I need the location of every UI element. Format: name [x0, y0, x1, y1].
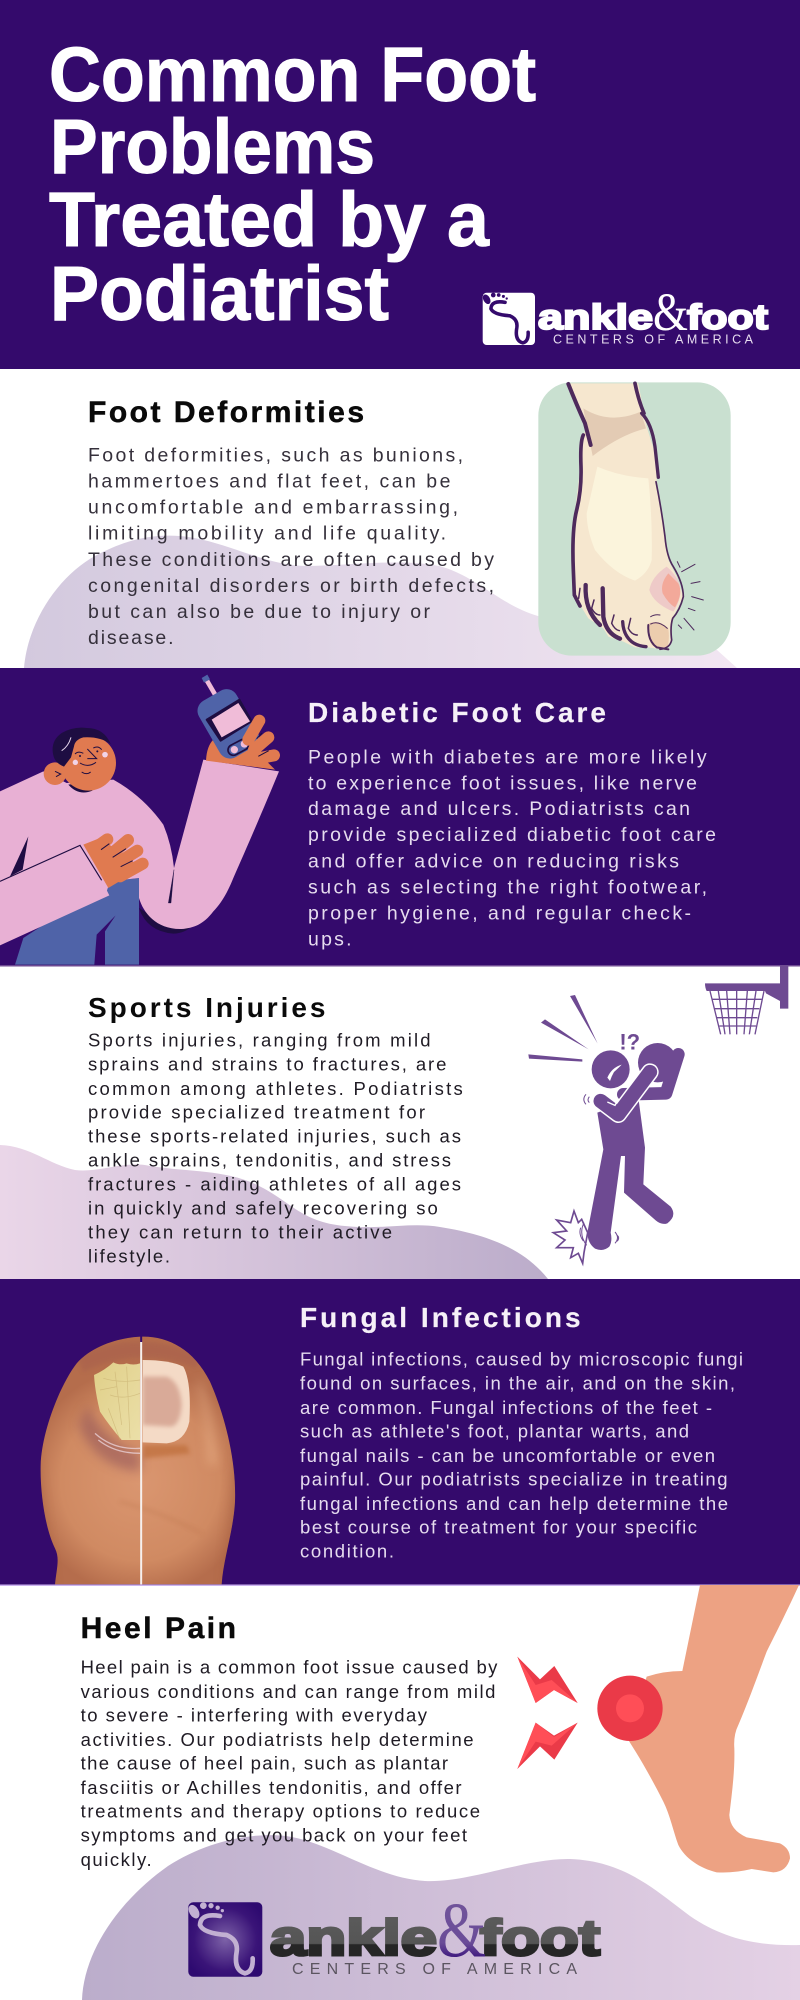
title: Treated by a [49, 177, 490, 263]
text block: heel pain: various conditions and can range from mild [81, 1681, 495, 1702]
illustration: toe with fungal nail [40, 1336, 236, 1584]
text block: fungal infections: are common. Fungal infections of the feet - [300, 1397, 712, 1418]
wrinkles [95, 1433, 140, 1453]
heading: diabetic foot care: Diabetic Foot Care [308, 697, 606, 728]
title: Common Foot [49, 32, 536, 118]
text block: sports injuries: fractures - aiding athletes of all ages [88, 1173, 461, 1194]
logo: ankle & foot, white: ankle [538, 298, 653, 337]
logo: ankle & foot, colour: & [437, 1886, 486, 1973]
heading: sports injuries: Sports Injuries [88, 992, 326, 1023]
text block: diabetic foot care: proper hygiene, and regular check- [308, 903, 691, 925]
upper hand palm [206, 740, 275, 770]
lower hand [83, 838, 143, 888]
heading: fungal infections: Fungal Infections [300, 1302, 581, 1333]
text block: diabetic foot care: damage and ulcers. Podiatrists can [308, 798, 690, 820]
text block: sports injuries: Sports injuries, ranging from mild [88, 1030, 431, 1050]
text block: fungal infections: such as athlete's foot, plantar warts, and [300, 1421, 689, 1442]
logo: ankle & foot, white [481, 282, 768, 346]
text block: sports injuries: ankle sprains, tendonitis, and stress [88, 1149, 451, 1170]
title [49, 32, 536, 337]
text block: heel pain: the cause of heel pain, such as plantar [81, 1753, 448, 1774]
text block: fungal infections: found on surfaces, in the air, and on the skin, [300, 1373, 735, 1394]
trousers [15, 878, 139, 965]
text block: diabetic foot care: provide specialized diabetic foot care [308, 824, 716, 846]
text block: fungal infections: condition. [300, 1541, 394, 1562]
decorative wave [24, 536, 737, 668]
text block: sports injuries: they can return to their active [88, 1222, 392, 1243]
title: Problems [50, 104, 375, 190]
motion marks [580, 1094, 619, 1245]
illustration: heel with pain marker [517, 1585, 799, 1873]
nail: infected half [94, 1362, 140, 1440]
text block: foot deformities: uncomfortable and embarrassing, [88, 497, 458, 519]
text block: sports injuries [88, 1030, 463, 1267]
icon: injured basketball player and hoop [528, 966, 788, 1263]
near arm [601, 1072, 650, 1114]
text block: heel pain: quickly. [81, 1849, 152, 1870]
heading: foot deformities: Foot Deformities [88, 396, 364, 429]
sweater [0, 760, 279, 945]
text block: foot deformities: These conditions are often caused by [88, 549, 494, 571]
head [592, 1050, 630, 1088]
text block: fungal infections: Fungal infections, caused by microscopic fungi [300, 1348, 743, 1369]
exclamation: !? [619, 1029, 640, 1054]
text block: sports injuries: these sports-related injuries, such as [88, 1126, 461, 1147]
text block: heel pain [81, 1657, 498, 1870]
glucose meter [205, 677, 220, 703]
text block: diabetic foot care: to experience foot issues, like nerve [308, 772, 697, 794]
text block: fungal infections: fungal infections and can help determine the [300, 1493, 728, 1514]
logo: ankle & foot, colour: foot [480, 1910, 600, 1966]
illustration: man with glucose meter [0, 675, 279, 965]
text block: foot deformities: hammertoes and flat feet, can be [88, 471, 450, 493]
text block: heel pain: treatments and therapy options to reduce [81, 1800, 480, 1822]
panel: diabetic foot care [0, 668, 800, 966]
nail: healthy half [143, 1360, 190, 1443]
text block: fungal infections [300, 1348, 743, 1562]
text block: foot deformities [88, 444, 494, 649]
text block: foot deformities: disease. [88, 627, 174, 649]
body and legs [587, 1098, 673, 1250]
starburst [553, 1211, 588, 1263]
decorative wave [0, 1145, 548, 1279]
logo: ankle & foot, colour [186, 1886, 600, 1978]
text block: diabetic foot care: and offer advice on reducing risks [308, 850, 679, 872]
title: Podiatrist [50, 251, 389, 337]
text block: sports injuries: in quickly and safely recovering so [88, 1198, 438, 1218]
text block: heel pain: fasciitis or Achilles tendonitis, and offer [81, 1777, 462, 1798]
panel: foot deformities [24, 382, 737, 668]
fingers on meter [248, 721, 274, 759]
shading around nail [80, 1346, 198, 1366]
text block: diabetic foot care [308, 746, 716, 950]
far arm [623, 1054, 678, 1094]
impact rays [528, 995, 598, 1062]
icon: foot with bunion [538, 382, 731, 656]
logo: ankle & foot, colour: CENTERS OF AMERICA [292, 1961, 577, 1978]
arm shadow [139, 908, 192, 934]
text block: fungal infections: best course of treatment for your specific [300, 1516, 697, 1538]
text block: foot deformities: limiting mobility and life quality. [88, 523, 446, 545]
text block: sports injuries: common among athletes. Podiatrists [88, 1078, 463, 1099]
panel: sports injuries [0, 966, 788, 1279]
text block: heel pain: activities. Our podiatrists help determine [81, 1729, 474, 1750]
text block: foot deformities: congenital disorders or birth defects, [88, 575, 494, 597]
logo: ankle & foot, white: CENTERS OF AMERICA [553, 332, 754, 346]
heading: heel pain: Heel Pain [81, 1612, 236, 1645]
header band [0, 0, 800, 369]
icon: lightning bolts [517, 1657, 578, 1769]
text block: sports injuries: lifestyle. [88, 1246, 170, 1267]
logo: ankle & foot, colour: ankle [270, 1910, 437, 1966]
text block: foot deformities: Foot deformities, such as bunions, [88, 444, 463, 466]
text block: sports injuries: provide specialized treatment for [88, 1102, 425, 1122]
basketball hoop [705, 966, 788, 1034]
text block: diabetic foot care: such as selecting the right footwear, [308, 876, 707, 898]
logo: ankle & foot, white: foot [687, 298, 768, 337]
text block: heel pain: Heel pain is a common foot issue caused by [81, 1657, 498, 1678]
text block: foot deformities: but can also be due to injury or [88, 601, 431, 623]
text block: sports injuries: sprains and strains to fractures, are [88, 1054, 446, 1075]
decorative wave [82, 1835, 800, 2000]
text block: fungal infections: fungal nails - can be uncomfortable or even [300, 1445, 715, 1466]
text block: heel pain: symptoms and get you back on your feet [81, 1825, 467, 1846]
text block: fungal infections: painful. Our podiatrists specialize in treating [300, 1469, 728, 1490]
panel: heel pain [81, 1585, 800, 2000]
text block: heel pain: to severe - interfering with everyday [81, 1705, 428, 1726]
text block: diabetic foot care: People with diabetes are more likely [308, 746, 707, 768]
logo: ankle & foot, white: & [653, 282, 688, 342]
divider [140, 1342, 142, 1584]
text block: diabetic foot care: ups. [308, 928, 352, 950]
ball [638, 1043, 677, 1082]
panel: fungal infections [0, 1279, 800, 1588]
ear, neck and head [68, 783, 93, 793]
